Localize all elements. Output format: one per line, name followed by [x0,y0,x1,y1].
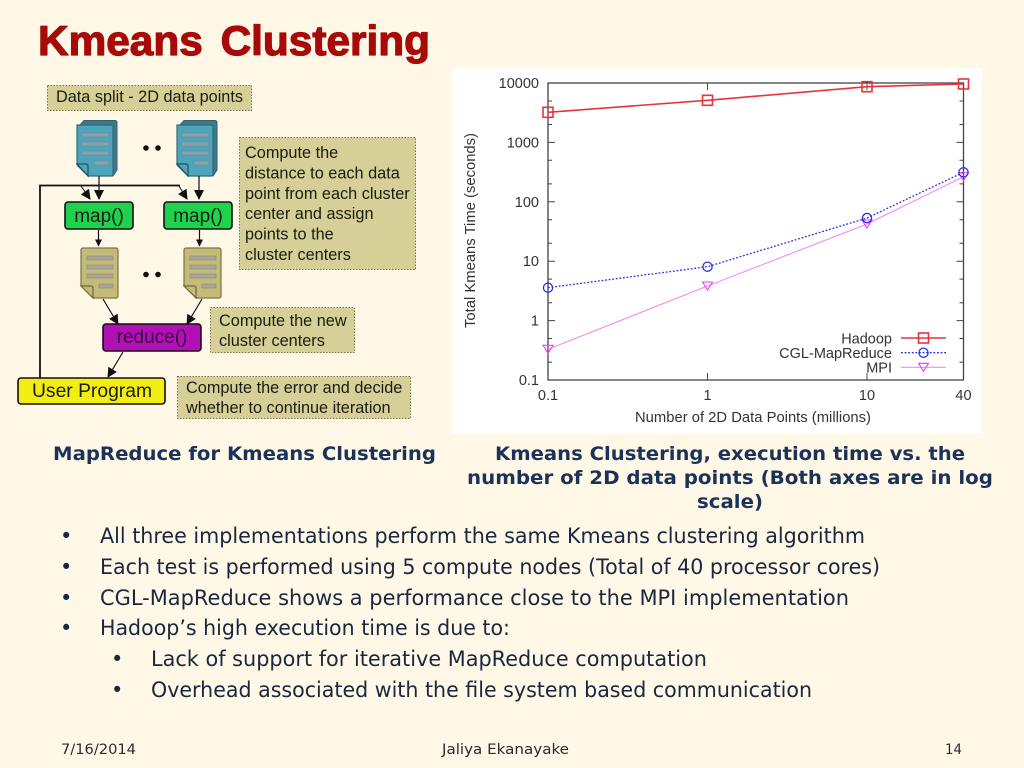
callout: compute the distance: cluster centers [245,246,351,264]
bullet list: • [111,647,123,671]
callout: compute new centers [210,308,354,352]
label: data split [48,86,252,110]
arrows: feedback loop from user program [40,176,202,378]
bullet list: • [60,524,72,548]
icon: ellipsis dots top [143,145,161,151]
callout: compute the distance: center and assign [245,205,374,223]
callout: compute the distance: point from each cluster [245,185,410,203]
series: CGL-MapReduce [543,168,968,292]
callout: compute the distance [240,138,416,270]
series: Hadoop [543,79,968,117]
bullet list [60,524,880,702]
callout: compute error: whether to continue iteration [185,399,391,417]
box: map left: map() [74,206,124,227]
bullet list: CGL-MapReduce shows a performance close to the MPI implementation [100,586,849,610]
y axis tick labels: 10000 [499,76,539,92]
panel: MapReduce flow diagram [18,86,416,418]
x axis tick labels [538,388,972,404]
legend: CGL-MapReduce [779,346,892,362]
y axis tick labels: 1 [531,314,539,330]
x axis tick labels: 0.1 [538,388,558,404]
bullet list: Lack of support for iterative MapReduce computation [151,647,707,671]
axis titles: Total Kmeans Time (seconds) [463,133,479,328]
y axis tick labels: 1000 [507,136,539,152]
box: map right: map() [173,206,223,227]
caption: right chart: scale) [697,491,763,513]
icon: ellipsis dots middle [143,272,161,277]
y axis tick labels: 0.1 [519,373,539,389]
chart: Kmeans execution time line chart [452,68,982,434]
legend: Hadoop [841,332,892,348]
title: Kmeans Clustering [38,17,430,64]
axis titles [463,133,871,426]
bullet list: • [60,555,72,579]
legend: MPI [866,360,892,376]
bullet list: All three implementations perform the same Kmeans clustering algorithm [100,524,865,548]
caption: left diagram: MapReduce for Kmeans Clustering [53,443,436,465]
caption: right chart [467,443,993,513]
bullet list: • [111,678,123,702]
bullet list: Each test is performed using 5 compute nodes (Total of 40 processor cores) [100,555,880,579]
box: map left [65,202,133,229]
series: MPI [543,173,968,353]
box: user program [18,378,165,404]
caption: right chart: Kmeans Clustering, execution time vs. the [495,443,965,465]
icon: blue data documents right [177,120,217,176]
callout: compute the distance: Compute the [245,144,338,162]
y axis tick labels: 10 [523,254,539,270]
x axis tick labels: 40 [955,388,972,404]
icon: olive documents left [81,248,118,298]
axis titles: Number of 2D Data Points (millions) [635,410,871,426]
box: user program: User Program [32,381,152,402]
callout: compute error: Compute the error and decide [186,379,402,397]
callout: compute the distance: points to the [245,226,334,244]
footer: date: 7/16/2014 [61,742,136,758]
box: reduce: reduce() [117,327,187,348]
bullet list: Overhead associated with the file system based communication [151,678,812,702]
callout: compute new centers: Compute the new [219,312,347,330]
callout: compute the distance: distance to each data [245,164,401,182]
icon: olive documents right [184,248,221,298]
box: reduce [103,324,201,351]
bullet list: • [60,586,72,610]
y axis tick labels [499,76,539,389]
bullet list: • [60,616,72,640]
bullet list: Hadoop’s high execution time is due to: [100,616,510,640]
x axis tick labels: 10 [859,388,875,404]
x axis tick labels: 1 [703,388,712,404]
y axis tick labels: 100 [515,195,539,211]
footer: author: Jaliya Ekanayake [441,742,569,758]
callout: compute new centers: cluster centers [219,332,325,350]
chart background [452,68,982,434]
legend [779,332,946,376]
caption: right chart: number of 2D data points (Both axes are in log [467,467,993,489]
icon: blue data documents left [77,120,117,176]
label: data split: Data split - 2D data points [56,88,243,106]
callout: compute error [178,376,410,418]
footer: page number: 14 [945,742,962,758]
plot frame and ticks [548,83,964,380]
box: map right [164,202,232,229]
